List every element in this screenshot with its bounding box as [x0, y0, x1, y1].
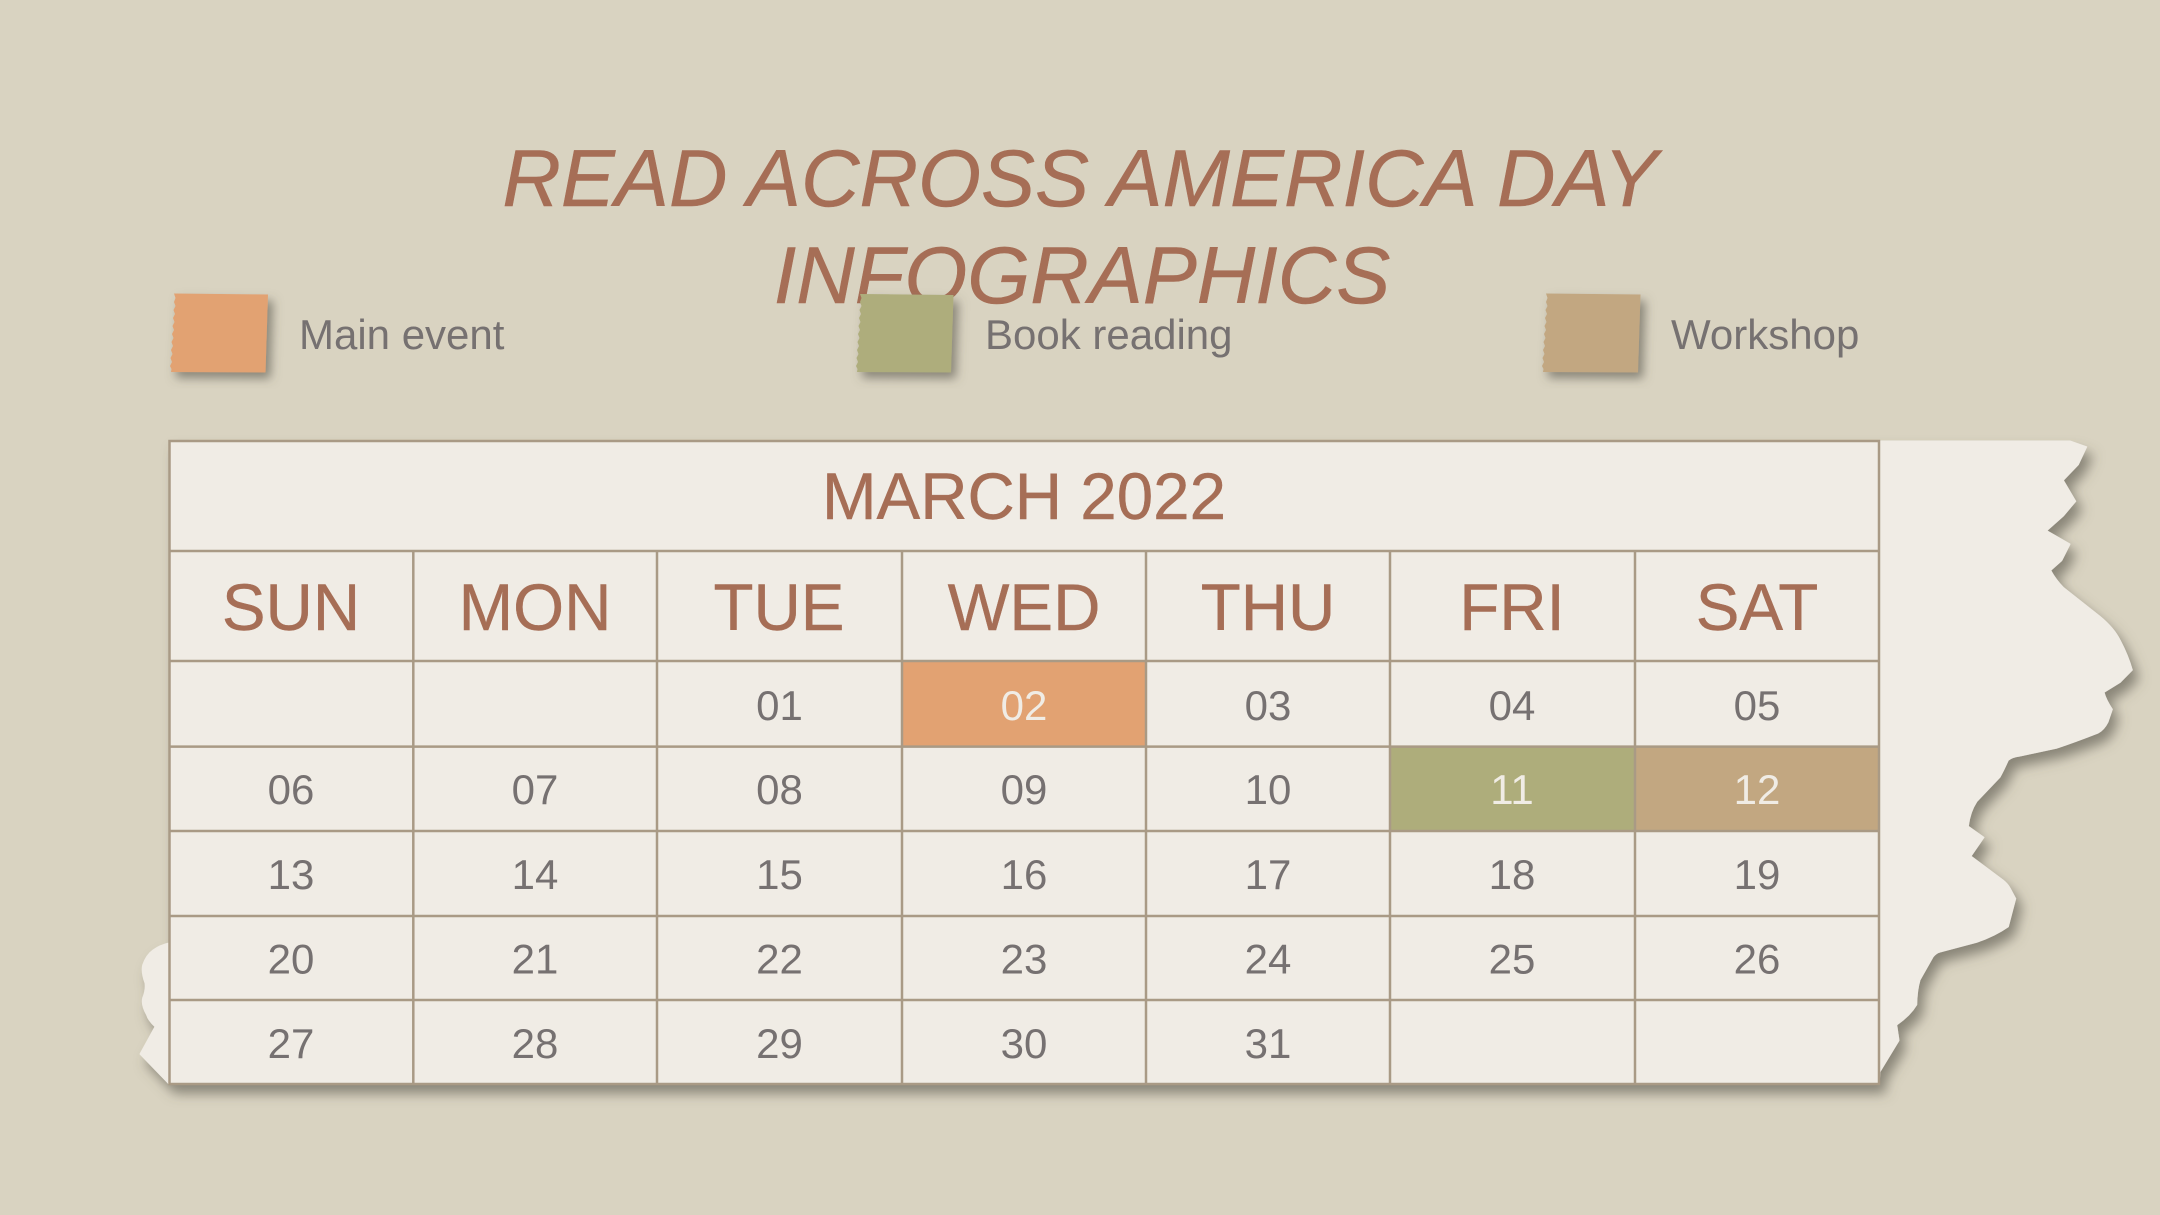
legend item: workshop [1542, 294, 1859, 372]
date numbers: 18 [1489, 851, 1535, 898]
legend item: book reading [856, 294, 1233, 372]
date numbers: 06 [268, 766, 314, 813]
date numbers: 02 [1001, 682, 1047, 729]
date numbers [268, 682, 1780, 1067]
date numbers: 04 [1489, 682, 1535, 729]
weekday headers: WED [948, 571, 1100, 644]
weekday headers: TUE [714, 571, 844, 644]
date numbers: 19 [1734, 851, 1780, 898]
date numbers: 31 [1245, 1020, 1291, 1067]
date numbers: 25 [1489, 936, 1535, 982]
legend label: workshop: Workshop [1671, 311, 1859, 358]
highlighted cells [902, 661, 1879, 831]
weekday headers [222, 571, 1818, 644]
date numbers: 14 [512, 851, 558, 898]
date numbers: 21 [512, 936, 558, 982]
date numbers: 17 [1245, 851, 1291, 898]
month heading: MARCH 2022 [822, 460, 1226, 533]
date numbers: 07 [512, 766, 558, 813]
cell: march 12 workshop [1635, 747, 1879, 831]
legend label: main event: Main event [299, 311, 505, 358]
legend item: main event [170, 294, 505, 372]
torn paper behind calendar [140, 441, 2132, 1084]
weekday headers: THU [1201, 571, 1335, 644]
date numbers: 03 [1245, 682, 1291, 729]
date numbers: 22 [756, 936, 803, 982]
date numbers: 15 [756, 851, 803, 898]
date numbers: 08 [756, 766, 803, 813]
date numbers: 24 [1245, 936, 1291, 982]
cell: march 2 main event [902, 661, 1146, 747]
date numbers: 16 [1001, 851, 1047, 898]
date numbers: 28 [512, 1020, 558, 1067]
title: INFOGRAPHICS [774, 231, 1390, 321]
legend [170, 294, 1859, 372]
weekday headers: MON [459, 571, 611, 644]
date numbers: 05 [1734, 682, 1780, 729]
date numbers: 23 [1001, 936, 1047, 982]
date numbers: 10 [1245, 766, 1291, 813]
cell: march 11 book reading [1390, 747, 1635, 831]
weekday headers: SUN [222, 571, 360, 644]
weekday headers: SAT [1696, 571, 1818, 644]
date numbers: 01 [756, 682, 803, 729]
legend label: book reading: Book reading [985, 311, 1233, 358]
date numbers: 29 [756, 1020, 803, 1067]
calendar table [169, 441, 1879, 1084]
date numbers: 09 [1001, 766, 1047, 813]
date numbers: 11 [1490, 766, 1534, 813]
swatch: workshop [1542, 294, 1640, 372]
date numbers: 30 [1001, 1020, 1047, 1067]
date numbers: 26 [1734, 936, 1780, 982]
date numbers: 12 [1734, 766, 1780, 813]
weekday headers: FRI [1459, 571, 1565, 644]
swatch: main event [170, 294, 268, 372]
date numbers: 27 [268, 1020, 314, 1067]
date numbers: 20 [268, 936, 314, 982]
date numbers: 13 [268, 851, 314, 898]
title: READ ACROSS AMERICA DAY [502, 134, 1663, 224]
swatch: book reading [856, 294, 954, 372]
